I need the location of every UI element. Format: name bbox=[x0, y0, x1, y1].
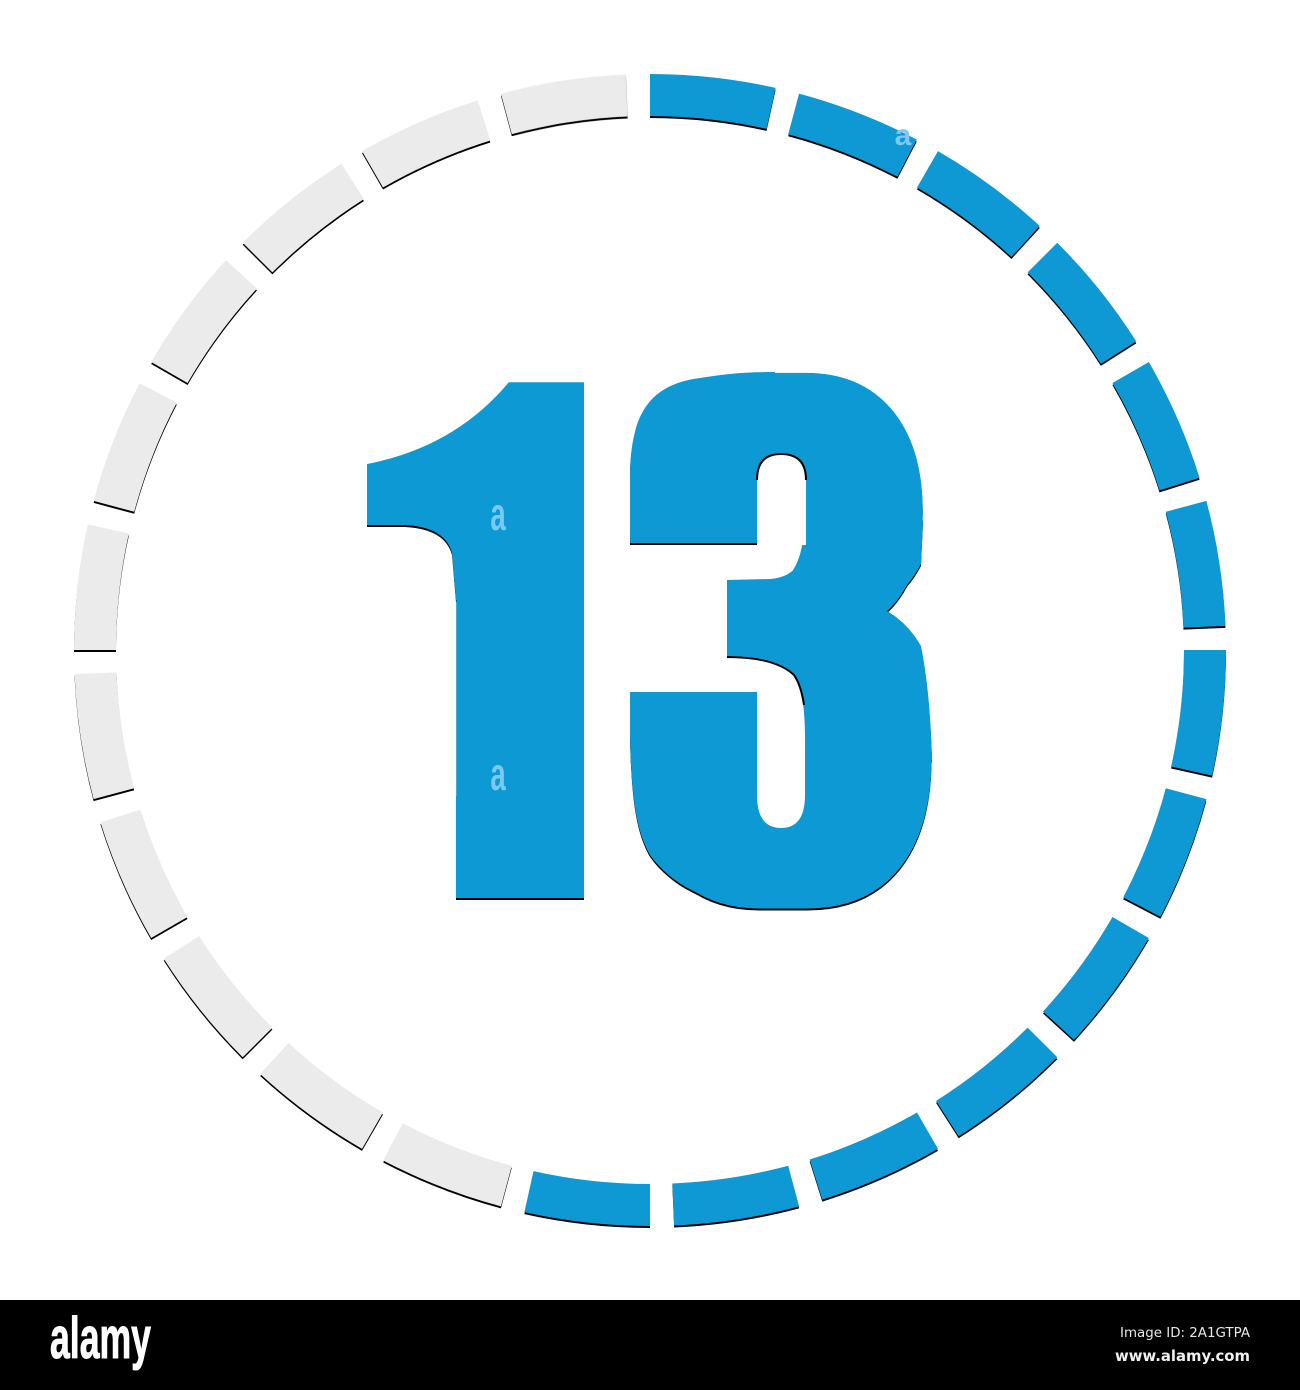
digit 1 bbox=[367, 382, 584, 900]
alamy logo: alamy bbox=[50, 1306, 151, 1371]
digit 1: 1 bbox=[309, 244, 698, 1033]
watermark letters: a bbox=[490, 750, 506, 801]
digit 3: 3 bbox=[643, 218, 926, 1061]
watermark letters: a bbox=[895, 119, 912, 152]
website: www.alamy.com bbox=[1115, 1347, 1250, 1365]
footer band bbox=[0, 1300, 1300, 1390]
progress ring: 13 of 24 segments bbox=[61, 61, 1239, 1239]
watermark letters bbox=[490, 119, 912, 801]
watermark letters: a bbox=[490, 490, 506, 541]
blue segments bbox=[524, 74, 1239, 1239]
big number 13 bbox=[367, 372, 932, 910]
gray segments bbox=[61, 61, 636, 1206]
image id: Image ID: 2A1GTPA bbox=[1120, 1326, 1250, 1341]
